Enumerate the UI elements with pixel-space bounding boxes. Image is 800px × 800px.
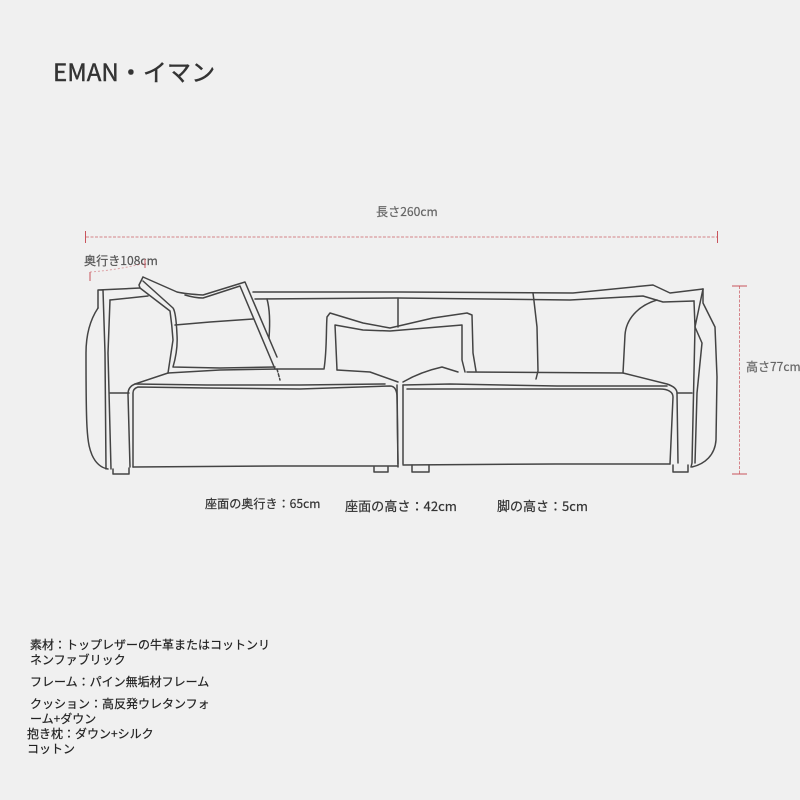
material: cover: [30, 636, 270, 668]
right seat cushion: [397, 372, 678, 465]
dimension label: seat height: 座面の高さ：42cm: [345, 496, 457, 515]
dimension label: leg height: 脚の高さ：5cm: [497, 496, 588, 515]
material: cover: 素材：トップレザーの牛革またはコットンリ: [30, 636, 270, 653]
material: cushion: [30, 695, 210, 726]
dimension label: depth: 奥行き108cm: [84, 252, 158, 269]
material: cushion: ーム+ダウン: [30, 710, 96, 726]
small pillow: [324, 313, 476, 382]
materials text: [27, 636, 270, 757]
sofa feet: [374, 465, 688, 472]
dimension label: seat depth: 座面の奥行き：65cm: [205, 495, 320, 512]
large pillow: [139, 277, 280, 380]
material: cover: ネンファブリック: [30, 651, 126, 668]
left seat cushion: [128, 369, 398, 467]
dimension label: length: 長さ260cm: [376, 203, 438, 220]
right arm: [623, 289, 717, 467]
material: throw pillow: [27, 725, 154, 757]
back cushion: [253, 285, 703, 379]
material: throw pillow: 抱き枕：ダウン+シルク: [27, 725, 154, 742]
left arm: [86, 288, 148, 474]
material: throw pillow: コットン: [27, 740, 75, 757]
material: frame: フレーム：パイン無垢材フレーム: [30, 673, 209, 690]
title: EMAN・イマン: [53, 53, 215, 88]
material: cushion: クッション：高反発ウレタンフォ: [30, 695, 210, 712]
dimension label: height: 高さ77cm: [746, 358, 800, 375]
